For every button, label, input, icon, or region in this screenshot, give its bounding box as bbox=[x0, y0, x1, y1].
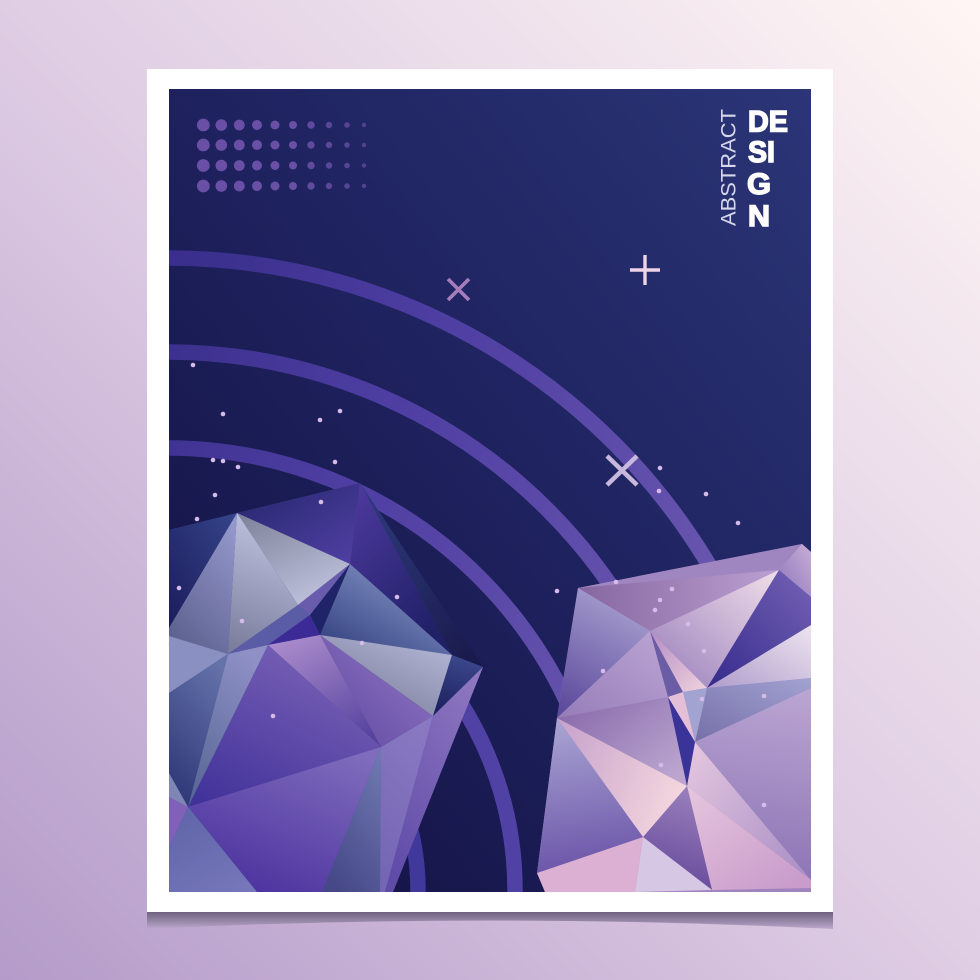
icon: small cross mark bbox=[448, 279, 469, 300]
poster white frame bbox=[147, 69, 833, 912]
icon: large cross mark bbox=[607, 456, 637, 485]
stacked word: DESIGN: SI bbox=[748, 136, 775, 169]
stacked word: DESIGN: G bbox=[747, 168, 771, 201]
vertical word: ABSTRACT: ABSTRACT bbox=[718, 109, 740, 226]
left crystal bbox=[169, 483, 483, 892]
scattered particles bbox=[177, 363, 766, 807]
icon: plus mark bbox=[630, 255, 660, 285]
poster artwork background bbox=[169, 89, 811, 892]
stacked word: DESIGN bbox=[747, 106, 788, 233]
right crystal bbox=[537, 544, 811, 892]
halftone dot grid bbox=[197, 119, 366, 192]
concentric ring arcs bbox=[169, 258, 799, 892]
stacked word: DESIGN: N bbox=[748, 200, 770, 233]
poster shadow bbox=[147, 912, 833, 929]
title: abstract design bbox=[718, 106, 788, 233]
stacked word: DESIGN: DE bbox=[748, 106, 788, 138]
